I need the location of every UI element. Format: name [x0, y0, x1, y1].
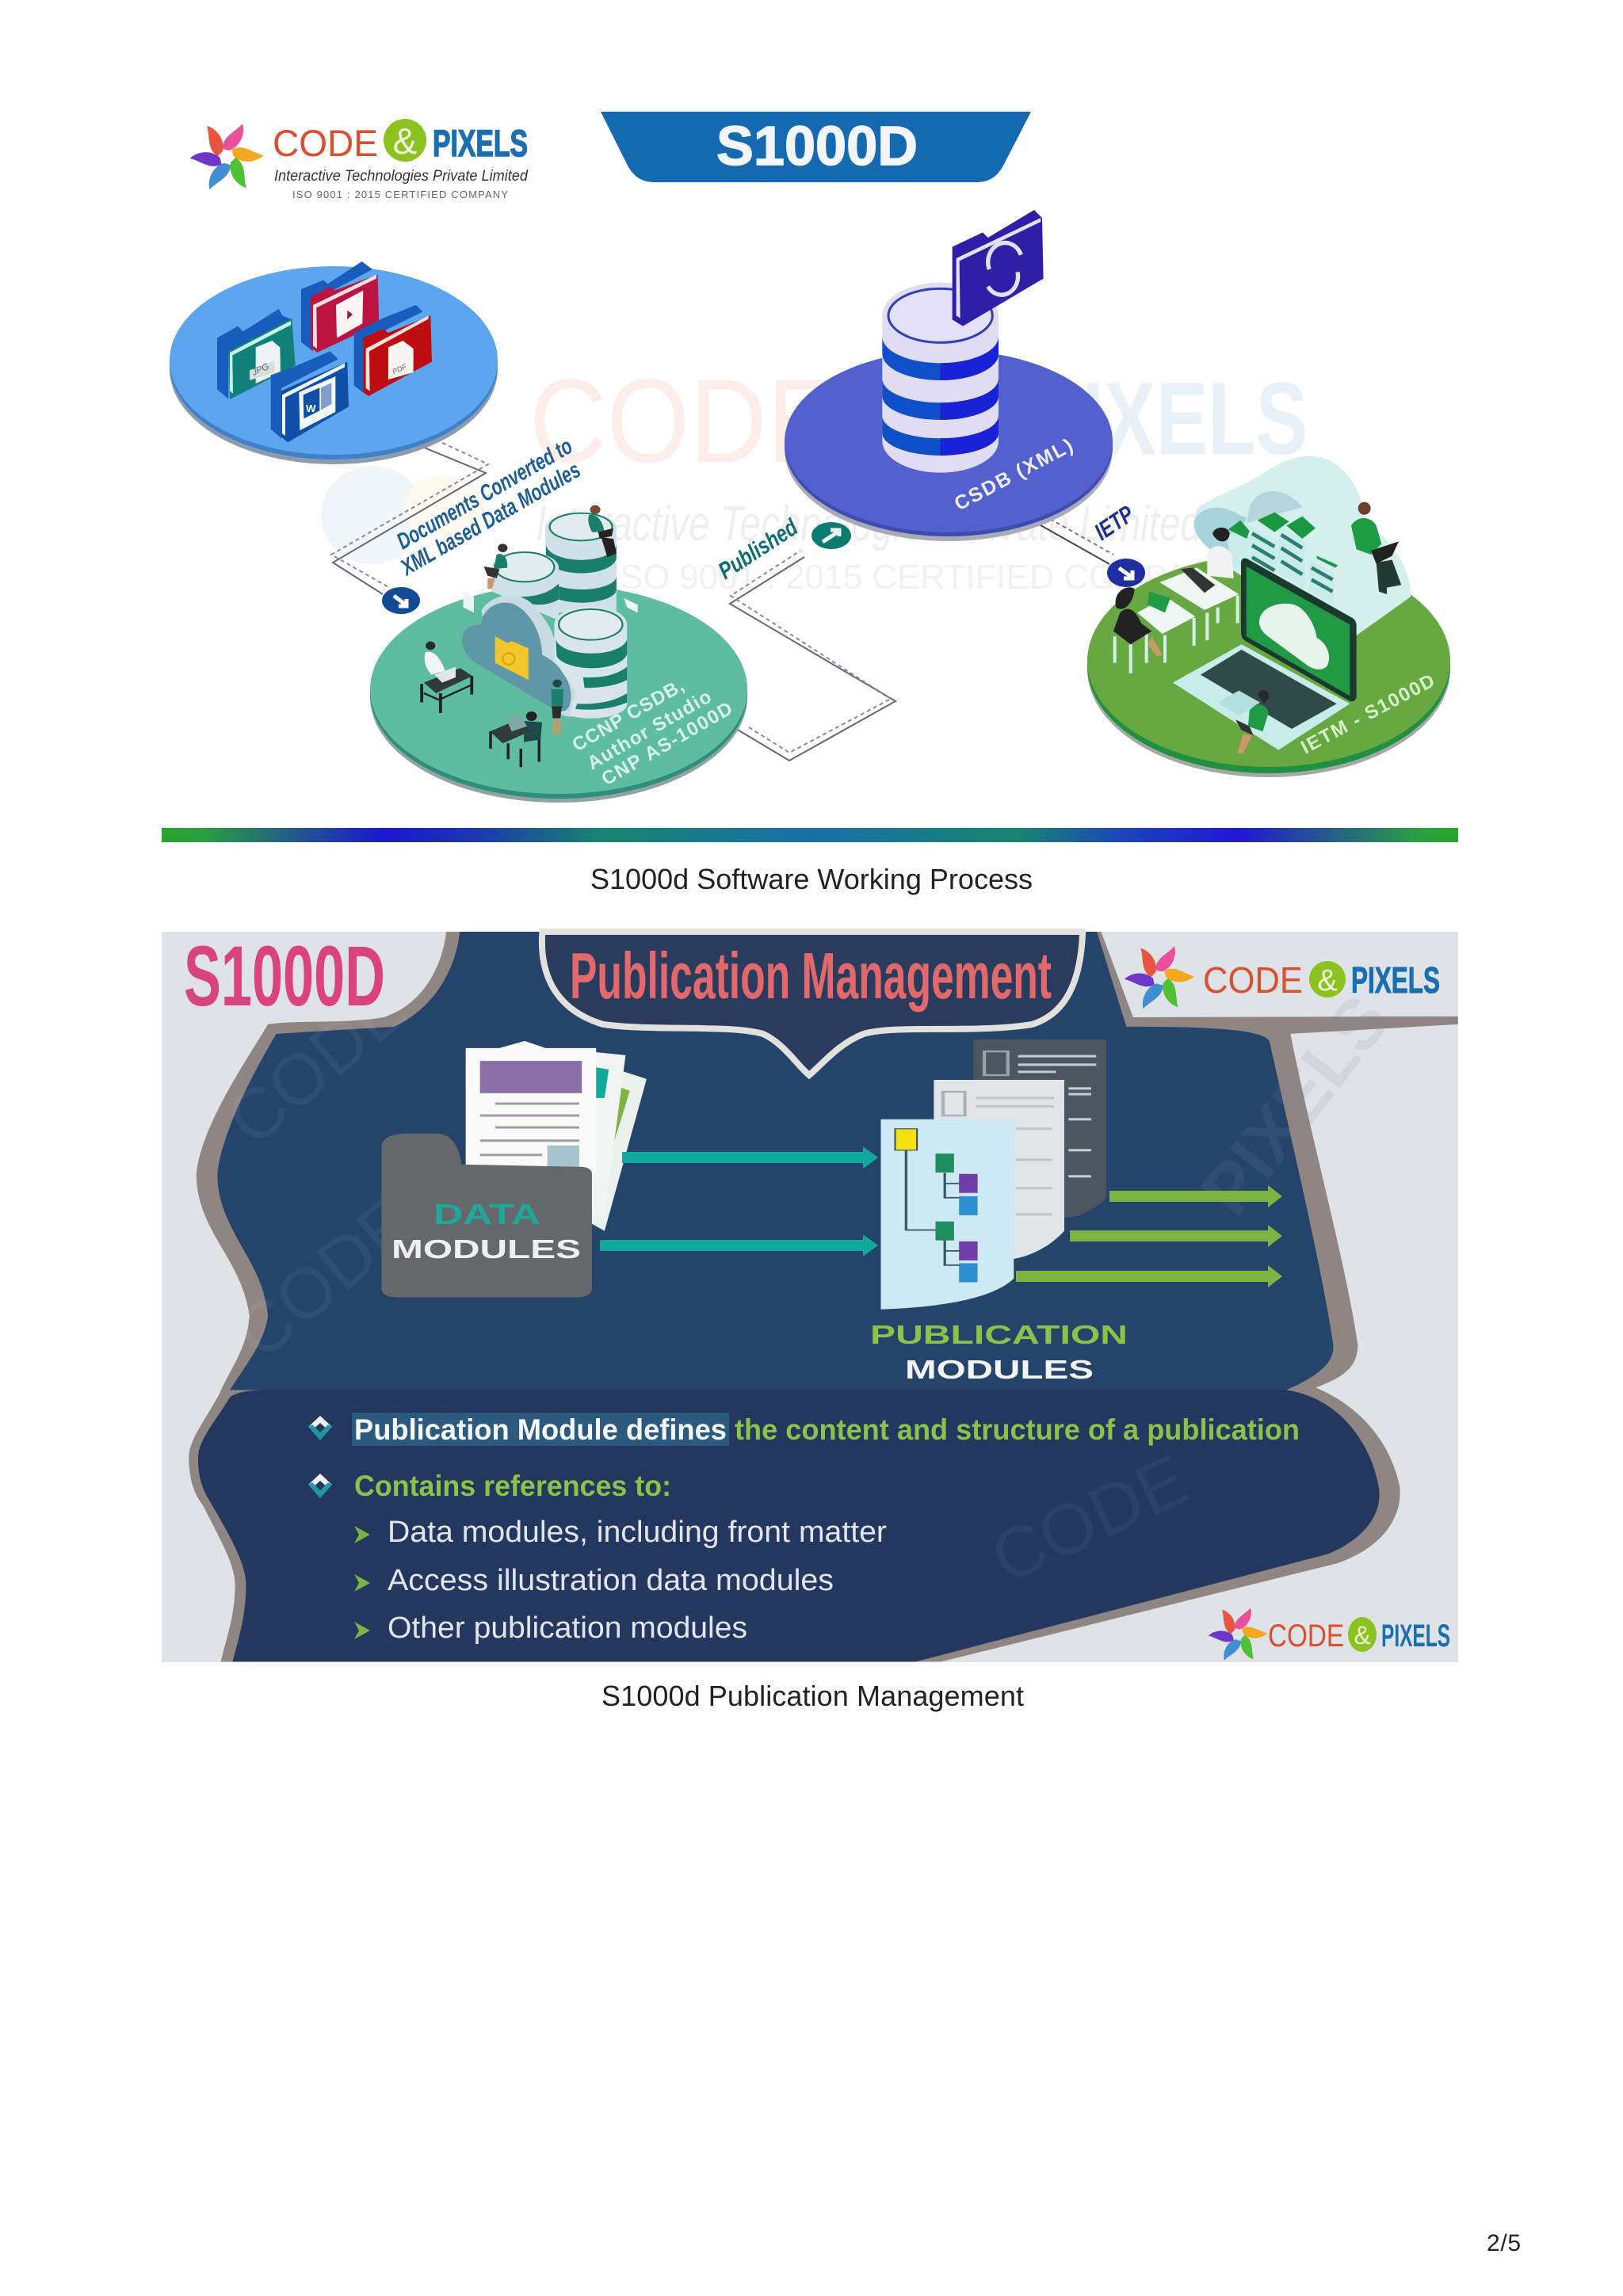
small document cards: [464, 590, 638, 612]
label: CCNP CSDB: CCNP CSDB,: [569, 675, 688, 756]
logo: Code and Pixels header: Interactive Technologies Private Limited: [274, 168, 529, 185]
watermark: top section: CODE: [529, 354, 838, 487]
stacked pages: [466, 1041, 647, 1231]
icon: diamond bullet 1: [308, 1416, 332, 1440]
logo: bottom right: CODE: [1268, 1619, 1344, 1653]
person: woman on keyboard: [1235, 690, 1270, 754]
person: man with laptop: [1351, 502, 1401, 594]
logo: top right: [1124, 946, 1440, 1009]
scene: IETM: [1113, 456, 1411, 754]
icon: pinwheel: [189, 124, 264, 190]
label: XML based Data Modules: XML based Data Modules: [395, 457, 585, 582]
sub-bullet: access illustration: Access illustration data modules: [388, 1564, 834, 1597]
icon: pinwheel: [1124, 946, 1195, 1009]
watermarks: [213, 968, 1200, 1599]
diagram: data modules: [381, 1041, 647, 1298]
watermarks: CODE: [980, 1440, 1200, 1599]
panel: source documents disc: [170, 261, 498, 464]
logo: Code and Pixels header: CODE: [273, 122, 378, 164]
tree lines: [906, 1150, 968, 1265]
icon: PDF folder: PDF: [391, 362, 409, 376]
person: seated on back database: [588, 505, 617, 557]
person: seated on left database: [484, 543, 507, 589]
folder: [953, 210, 1044, 326]
label: Published: Published: [714, 514, 803, 585]
tree page: [880, 1119, 1014, 1310]
logo: bottom right: &: [1354, 1621, 1371, 1650]
watermark: top section: ISO 9001 : 2015 CERTIFIED COMPANY: [610, 558, 1236, 597]
caption: working process: S1000d Software Working Process: [590, 863, 1033, 895]
title: Publication Management: Publication Management: [570, 939, 1052, 1013]
title tab: [542, 932, 1083, 1075]
logo: Code and Pixels header: [189, 119, 529, 200]
icons: file folders: [217, 261, 432, 442]
arrows: green: [1016, 1185, 1282, 1287]
logo: bottom right: [1208, 1608, 1450, 1661]
banner: S1000D: [601, 112, 1031, 182]
database cylinder: [882, 283, 999, 473]
icon: arrow badge up teal: [812, 522, 851, 549]
sub-bullet: data modules: Data modules, including front matter: [388, 1516, 887, 1549]
logo: top right: &: [1317, 964, 1338, 997]
watermarks: CODE: [221, 1182, 430, 1375]
label: Documents Converted to: Documents Converted to: [393, 433, 577, 555]
caption: publication management: S1000d Publication Management: [601, 1680, 1024, 1712]
icon: database and folder: [882, 210, 1044, 473]
label: MODULES publication: MODULES: [905, 1355, 1094, 1384]
icon: arrow bullet 2: [354, 1574, 370, 1592]
logo: top right: PIXELS: [1351, 959, 1440, 1001]
grey page: [934, 1080, 1064, 1260]
bullet text: Contains references to: Contains references to:: [354, 1470, 671, 1502]
dark page: [973, 1039, 1106, 1218]
person: at desk left: [422, 642, 472, 713]
panel: publication management: [162, 928, 1458, 1662]
gradient divider bar: [162, 828, 1458, 842]
folder: [381, 1134, 592, 1298]
cloud backdrop: [1193, 456, 1411, 636]
label: Author Studio: Author Studio: [583, 686, 715, 774]
diagram: publication module pages: [880, 1039, 1106, 1310]
icon: video folder: [301, 261, 379, 353]
connector: data modules to CSDB: [730, 551, 896, 761]
person: standing: [552, 680, 563, 734]
heading: S1000D: S1000D: [184, 928, 385, 1024]
icon: arrow bullet 1: [354, 1526, 370, 1543]
icon: Word folder: [271, 351, 349, 442]
cloud: [462, 596, 586, 717]
background shapes: [189, 932, 1458, 1661]
banner: S1000D: S1000D: [716, 115, 918, 177]
database left: [492, 552, 559, 620]
icon: diamond bullet 2: [308, 1474, 332, 1498]
icon: Word folder: W: [306, 402, 316, 414]
label: PUBLICATION: PUBLICATION: [870, 1320, 1128, 1349]
icon: arrow bullet 3: [354, 1622, 370, 1639]
panel: CSDB disc: [785, 210, 1113, 541]
watermark: top section: Interactive Technologies Private Limited: [536, 497, 1203, 551]
watermark: top section: [321, 354, 1308, 597]
desks: [1115, 568, 1239, 673]
text block: bullets: [308, 1413, 1300, 1645]
person: woman typing: [1181, 528, 1234, 593]
panel: CCNP CSDB disc: [370, 505, 747, 803]
icon: arrow badge down blue: [382, 587, 420, 614]
connector: documents to data modules: [331, 438, 488, 594]
label: MODULES data: MODULES: [391, 1234, 581, 1264]
person: woman seated: [1113, 587, 1170, 656]
panel: IETM disc: [1087, 456, 1450, 777]
bullet text: Publication Module defines: Publication Module defines: [354, 1413, 727, 1446]
scene: databases and cloud: [422, 505, 638, 767]
arrows: teal: [600, 1146, 878, 1257]
label: DATA: DATA: [433, 1198, 540, 1230]
watermark: top section: PIXELS: [1030, 360, 1308, 476]
connector: CSDB to IETP: [1035, 519, 1113, 564]
icon: PDF folder: [354, 305, 432, 396]
logo: Code and Pixels header: PIXELS: [433, 122, 528, 164]
sub-bullet: other modules: Other publication modules: [388, 1611, 747, 1645]
label: IETM - S1000D: IETM - S1000D: [1297, 670, 1438, 758]
label: IETP: IETP: [1090, 501, 1140, 546]
logo: Code and Pixels header: &: [393, 120, 417, 162]
database back: [545, 513, 617, 612]
logo: bottom right: PIXELS: [1381, 1619, 1450, 1653]
servers: [1226, 513, 1338, 605]
watermarks: CODE: [213, 968, 422, 1161]
laptop base and keyboard: [1173, 644, 1350, 750]
bullet text: content and structure: the content and structure of a publication: [735, 1413, 1300, 1446]
icon: pinwheel: [1208, 1608, 1268, 1661]
logo: Code and Pixels header: ISO 9001 : 2015 CERTIFIED COMPANY: [292, 189, 508, 200]
icon: JPG folder: JPG: [250, 362, 271, 378]
laptop screen: [1241, 559, 1357, 701]
person: at desk bottom: [490, 711, 542, 767]
label: CSDB (XML): CSDB (XML): [951, 434, 1077, 515]
page number: 2/5: [1487, 2230, 1521, 2256]
icon: JPG folder: [217, 309, 296, 399]
database front: [554, 606, 627, 719]
watermark: pixels on light region: PIXELS: [1186, 981, 1405, 1230]
icon: arrow badge down navy: [1107, 559, 1145, 587]
logo: top right: CODE: [1203, 959, 1303, 1001]
label: CNP AS-1000D: CNP AS-1000D: [598, 698, 736, 790]
